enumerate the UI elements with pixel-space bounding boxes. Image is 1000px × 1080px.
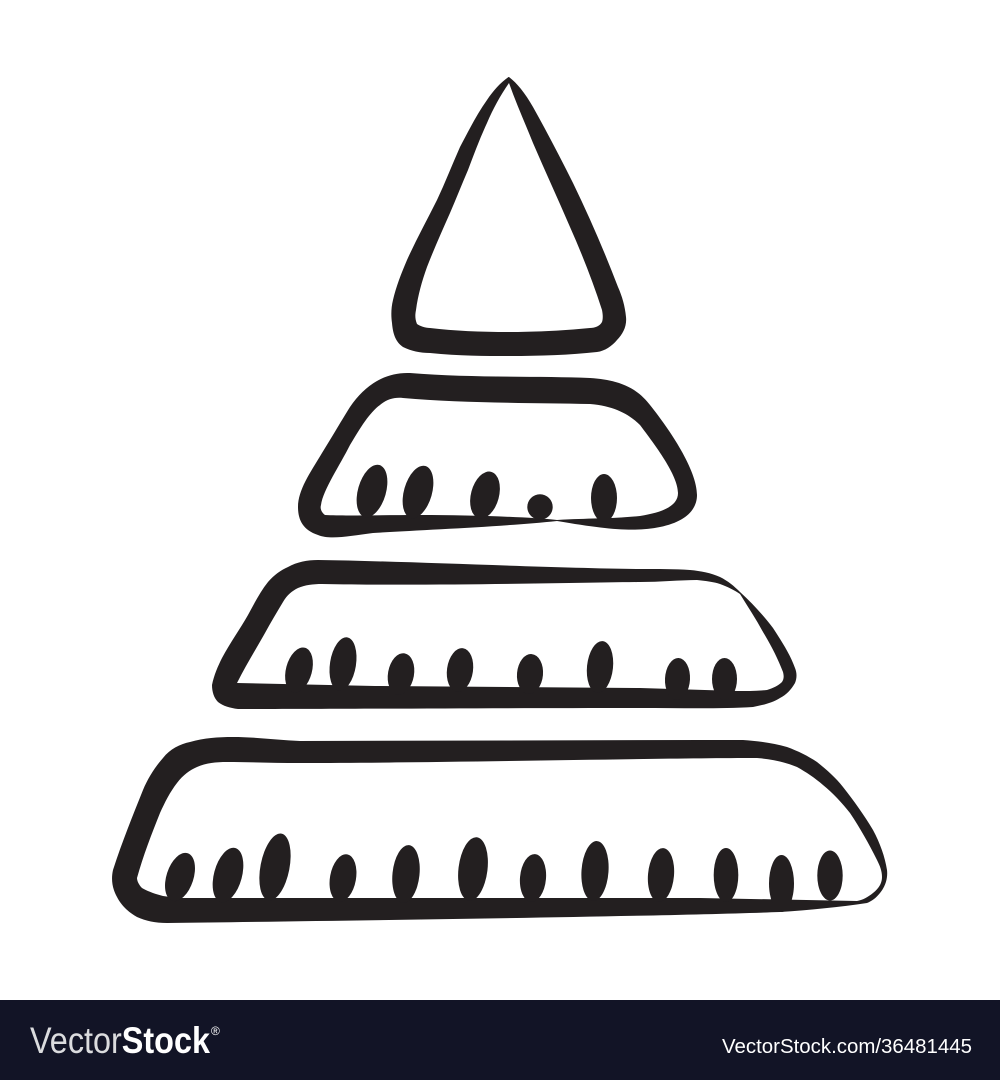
pyramid tier 2 [298,373,697,537]
pyramid tier 3 [212,560,796,709]
icon: pyramid [112,77,887,923]
pyramid tier 4 [112,737,887,923]
registered mark: ® [211,1024,220,1038]
logo wordmark: VectorStock [30,1020,210,1061]
pyramid top triangle [391,77,626,356]
image id url: VectorStock.com/36481445 [722,1036,972,1058]
footer bar [0,1000,1000,1080]
